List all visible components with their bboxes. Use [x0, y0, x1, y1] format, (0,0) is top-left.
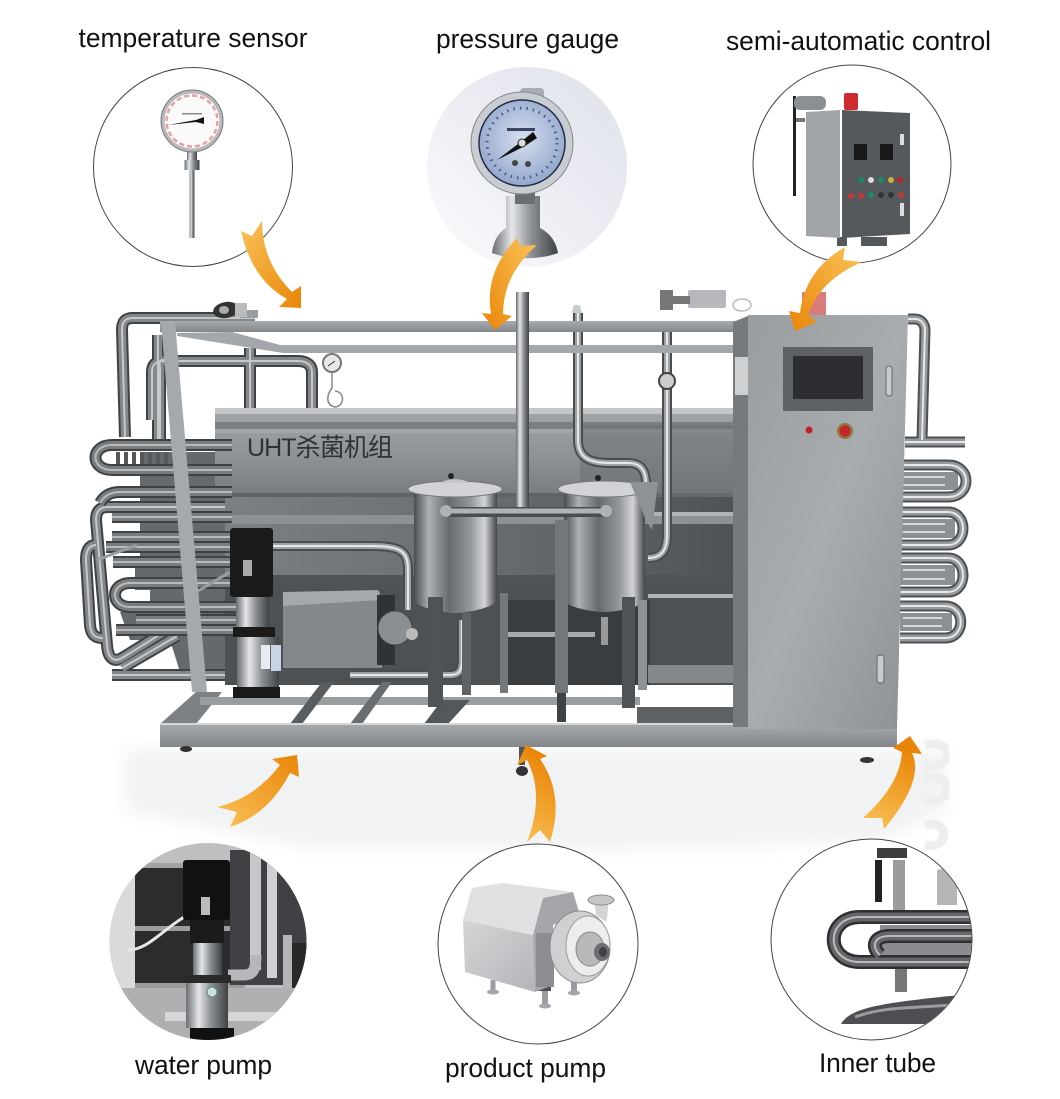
- callout circle: pressure gauge: [427, 67, 627, 267]
- product pump motor: [283, 590, 418, 668]
- label: temperature sensor: temperature sensor: [78, 23, 308, 53]
- arrow: semi-automatic control: [789, 247, 862, 331]
- arrow: product pump: [517, 745, 556, 842]
- door handles: [877, 366, 892, 683]
- callout circle: product pump: [438, 844, 638, 1044]
- icon: cable: [128, 916, 184, 952]
- arrow: water pump: [217, 755, 299, 827]
- connecting pipe across vessels: [440, 505, 612, 517]
- rear pipework: [86, 318, 408, 675]
- icon: inner tube bends: [834, 848, 975, 1024]
- frame: [160, 321, 735, 692]
- left bundle backing: [120, 452, 232, 672]
- UHT nameplate text: UHT杀菌机组: [247, 434, 393, 462]
- left vessel: [408, 473, 502, 613]
- callout circle: temperature sensor: [94, 68, 292, 266]
- icon: pressure gauge: [471, 88, 573, 258]
- machine: UHT sterilizer unit: [86, 290, 966, 776]
- touch screen: [783, 347, 873, 411]
- front pipework: [273, 313, 667, 675]
- vessel legs: [428, 520, 647, 722]
- icon: thermometer: [161, 90, 223, 238]
- pump head: [183, 860, 230, 920]
- right tube bundle: [900, 319, 966, 638]
- label: product pump: product pump: [445, 1053, 606, 1083]
- callout circle: inner tube: [771, 839, 975, 1040]
- top valve: [212, 300, 258, 320]
- top actuator valve: [572, 290, 751, 389]
- control cabinet: [733, 292, 908, 729]
- callout circle: semi-automatic control: [753, 65, 951, 263]
- tall vent pipe: [516, 292, 529, 509]
- tank panel: [215, 408, 733, 498]
- base frame: [160, 682, 897, 776]
- arrow: inner tube: [863, 736, 922, 829]
- icon: control box: [793, 93, 910, 246]
- callout circle: water pump: [108, 842, 308, 1043]
- label: pressure gauge: pressure gauge: [436, 24, 619, 54]
- floor reflection: [125, 744, 948, 850]
- indicator buttons: [806, 423, 853, 439]
- label: inner tube: Inner tube: [819, 1048, 936, 1078]
- left tube bundle: [96, 445, 236, 630]
- arrow: pressure gauge: [482, 238, 537, 330]
- arrow: temperature sensor: [241, 221, 301, 308]
- pump body: [193, 943, 222, 977]
- water pump: [230, 528, 281, 698]
- icon: centrifugal pump: [463, 883, 614, 1008]
- right vessel: [558, 475, 658, 612]
- small pressure gauge: [323, 354, 342, 407]
- lower back panel: [225, 497, 733, 685]
- label: semi-automatic control: semi-automatic control: [726, 26, 991, 56]
- label: water pump: water pump: [134, 1050, 272, 1080]
